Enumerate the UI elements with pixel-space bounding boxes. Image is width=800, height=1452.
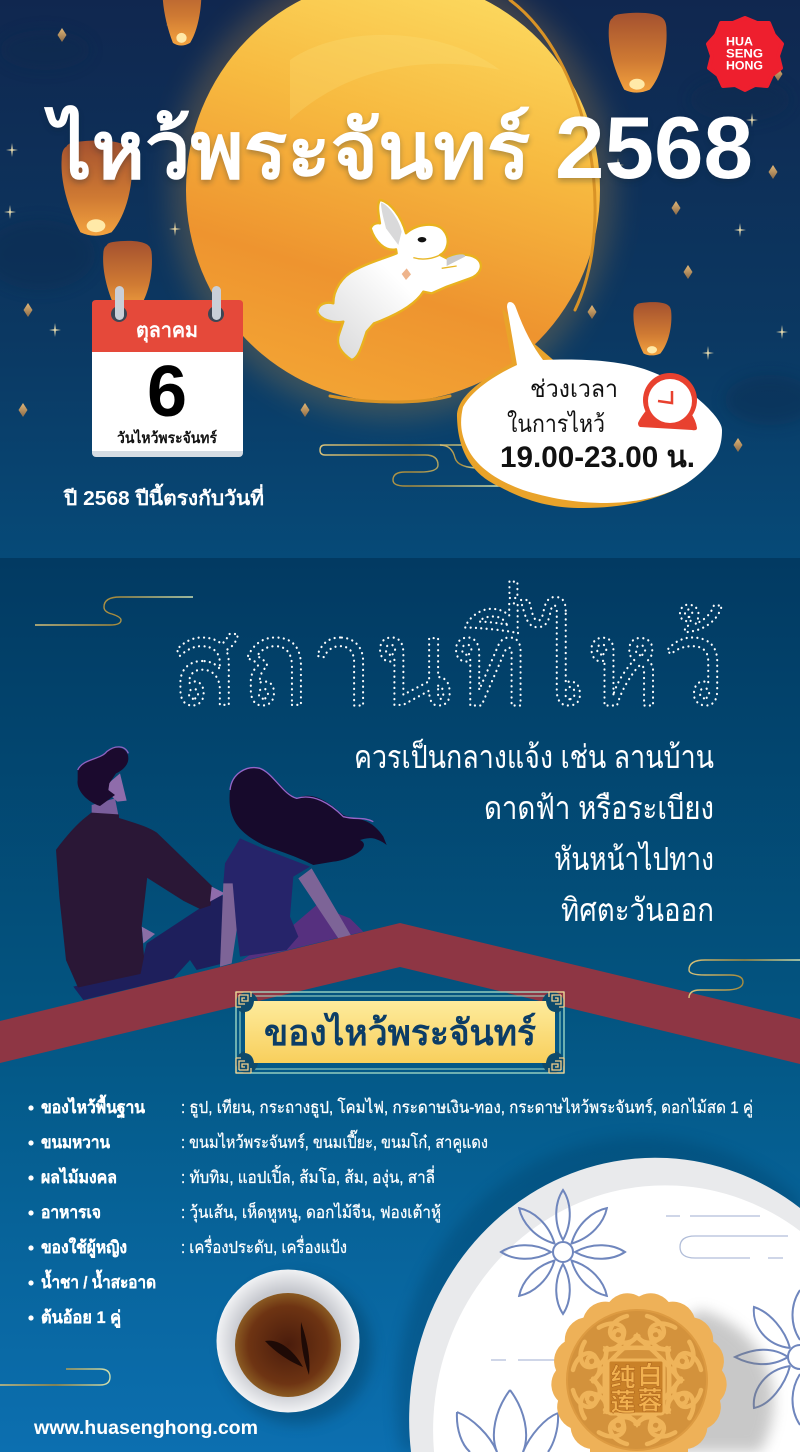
plaque corner knots [236,992,564,1073]
icon: alarm clock [638,373,697,430]
title: ไหว้พระจันทร์ 2568 [43,98,753,197]
text block: location advice: หันหน้าไปทาง [554,841,714,877]
plaque text: ของไหว้พระจันทร์ [264,1011,537,1053]
lantern top [162,0,201,46]
calendar month: ตุลาคม [136,320,198,343]
decorative plate lines [491,1216,788,1360]
list: offerings [28,1094,753,1329]
text block: location advice [354,738,714,928]
text block: location advice: ดาดฟ้า หรือระเบียง [484,790,714,826]
logo: Hua Seng Hong [708,18,782,90]
plate with flowers [396,1137,800,1452]
dark cloud shapes [0,30,800,425]
panel: top moon festival scene [0,0,800,558]
lantern right [633,302,671,355]
speech bubble: worship time [457,302,722,508]
mooncake lattice pattern [569,1312,705,1448]
calendar [92,286,243,457]
gold line lower left [0,1369,110,1385]
flower right [735,1290,800,1425]
illustration: couple on the roof [57,747,387,1000]
flower lower [457,1390,558,1452]
item: sweets: ขนมหวาน [41,1133,110,1152]
item: vegetarian food [28,1201,441,1223]
title: ไหว้พระจันทร์ 2568 [43,101,753,200]
icon: jumping rabbit [317,200,481,360]
moon [171,0,615,418]
mooncake center characters [608,1360,664,1417]
lantern mid left [103,241,152,313]
item: women's items: ของใช้ผู้หญิง [41,1237,127,1259]
panel: worship location [0,558,800,1452]
lantern upper right [609,13,667,93]
item: tea and water [28,1269,156,1292]
stars [4,18,788,362]
roof [0,923,800,1064]
item: vegetarian food: อาหารเจ [41,1203,101,1222]
plaque frame [236,992,564,1073]
gold cloud lines [320,445,500,486]
logo: Hua Seng Hong: HONG [726,58,763,72]
logo: Hua Seng Hong: SENG [726,46,763,60]
item: fruit: : ทับทิม, แอปเปิ้ล, ส้มโอ, ส้ม, องุ่น, สาลี่ [181,1165,435,1188]
plaque corner discs [236,992,564,1073]
text block: location advice: ควรเป็นกลางแจ้ง เช่น ลานบ้าน [354,738,714,775]
plaque fill [245,1001,555,1063]
flower upper [501,1190,625,1314]
woman [220,768,387,967]
mooncake center characters: 莲 [610,1389,636,1417]
icon: tea cup [216,1270,372,1424]
lantern left [61,140,132,236]
heading: dotted location title: สถานที่ไหว้ [170,581,726,731]
mooncake scalloped edge [551,1293,727,1449]
text: website: www.huasenghong.com [33,1418,258,1439]
speech bubble: worship time: 19.00-23.00 น. [500,441,695,474]
background: section gradient [0,558,800,1452]
gold line right [689,960,800,998]
speech bubble: worship time: ในการไหว้ [507,410,605,438]
item: sweets [28,1129,488,1153]
item: women's items: : เครื่องประดับ, เครื่องแป้ง [181,1235,347,1257]
item: tea and water: น้ำชา / น้ำสะอาด [41,1269,156,1292]
bubble text: ช่วงเวลา [530,376,618,403]
mooncake center characters: 纯 [610,1364,636,1392]
logo: Hua Seng Hong: HUA [726,34,753,48]
calendar caption: วันไหว้พระจันทร์ [117,428,218,447]
mooncake center characters: 蓉 [637,1387,663,1415]
item: fruit [28,1165,435,1188]
background: night sky [0,0,800,558]
mooncake center characters: 白 [637,1362,663,1390]
icon: mooncake [551,1293,774,1452]
calendar rings [111,286,224,322]
item: sugar cane: ต้นอ้อย 1 คู่ [41,1308,121,1329]
item: basic [28,1094,753,1119]
item: basic: ของไหว้พื้นฐาน [41,1094,145,1119]
calendar day number: 6 [147,352,187,432]
mooncake base fill [590,1436,688,1452]
heading plaque: offerings [236,992,564,1073]
item: vegetarian food: : วุ้นเส้น, เห็ดหูหนู, ดอกไม้จีน, ฟองเต้าหู้ [181,1201,441,1223]
gold line upper left [35,597,193,625]
text block: location advice: ทิศตะวันออก [561,892,714,928]
diamonds [18,28,782,452]
item: sweets: : ขนมไหว้พระจันทร์, ขนมเปี๊ยะ, ขนมโก๋, สาคูแดง [181,1129,488,1153]
item: fruit: ผลไม้มงคล [41,1167,117,1187]
man [57,747,225,1000]
text: year note: ปี 2568 ปีนี้ตรงกับวันที่ [63,483,264,510]
item: women's items [28,1235,347,1259]
